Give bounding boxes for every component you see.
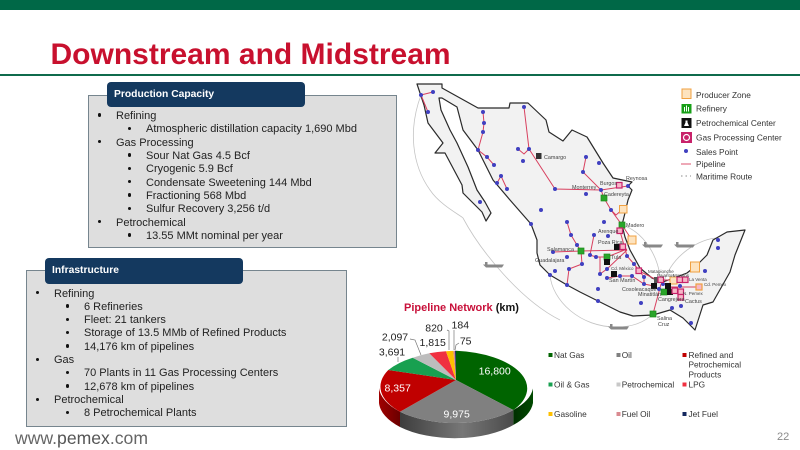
- pie legend: [548, 350, 741, 419]
- icon: petrochemical center: [682, 118, 692, 128]
- map place labels: Cadereyta: [604, 192, 629, 198]
- map place labels: Matapionche: [648, 269, 674, 274]
- map place labels: Poza Rica: [598, 240, 623, 246]
- map of Mexico: [413, 84, 745, 330]
- footer url: www.pemex.com: [15, 428, 148, 448]
- map place labels: Salina: [657, 316, 672, 322]
- text block: production capacity list: Cryogenic 5.9 Bcf: [146, 163, 233, 175]
- legend: jet fuel: Jet Fuel: [688, 409, 718, 419]
- map place labels: [535, 155, 727, 328]
- map place labels: Guadalajara: [535, 258, 564, 264]
- mexico mainland and baja outline: [417, 84, 745, 330]
- map place labels: Minatitlán: [638, 292, 661, 298]
- text block: infrastructure list: Petrochemical: [54, 394, 124, 406]
- pipelines: [421, 92, 699, 314]
- title rule: [0, 74, 800, 76]
- text block: infrastructure list: Fleet: 21 tankers: [84, 314, 166, 326]
- map place labels: Pajaritos: [657, 273, 675, 278]
- icon: refinery: [682, 104, 692, 114]
- legend: refined and petrochemical products: [682, 350, 741, 380]
- text block: production capacity list: 13.55 MMt nominal per year: [146, 230, 283, 242]
- pie value labels: 75: [460, 336, 472, 348]
- text block: production capacity list: Condensate Sweetening 144 Mbd: [146, 177, 312, 189]
- text block: infrastructure list: 12,678 km of pipelines: [84, 381, 194, 393]
- pie value labels: 8,357: [385, 382, 411, 394]
- text block: production capacity list: Fractioning 568 Mbd: [146, 190, 246, 202]
- label: sales point: Sales Point: [696, 147, 739, 157]
- legend: petrochemical: Petrochemical: [622, 380, 674, 390]
- map place labels: Cactus: [685, 299, 702, 305]
- text block: infrastructure list: Gas: [54, 354, 74, 366]
- petrochemical centers: [536, 153, 673, 295]
- text block: infrastructure list: 70 Plants in 11 Gas Processing Centers: [84, 367, 278, 379]
- slice: refined and petrochemical products 8,357: [380, 370, 456, 412]
- top green bar: [0, 0, 800, 10]
- icon: sales point: [684, 149, 688, 153]
- sales points: [419, 90, 720, 325]
- map place labels: Tula: [611, 255, 621, 261]
- map place labels: Cd. México: [611, 266, 634, 271]
- map place labels: Cosoleacaque: [622, 287, 656, 293]
- slice: lpg 1,815: [429, 351, 456, 380]
- label: producer zone: Producer Zone: [696, 90, 751, 100]
- pie value labels: 2,097: [382, 331, 408, 343]
- legend: refined and petrochemical products: Petrochemical: [688, 360, 741, 370]
- text block: production capacity list: Sulfur Recovery 3,256 t/d: [146, 203, 270, 215]
- map place labels: Cd. Pemex: [704, 282, 727, 287]
- icon: pipeline: [681, 163, 691, 165]
- legend: lpg: LPG: [688, 380, 705, 390]
- page number: 22: [777, 431, 789, 443]
- label: pipeline: Pipeline: [696, 159, 726, 169]
- slice: gasoline 820: [446, 351, 456, 380]
- panel: production capacity: [88, 95, 397, 248]
- text block: production capacity list: Refining: [116, 110, 156, 122]
- pie chart: pipeline network: [379, 320, 533, 438]
- map place labels: Cruz: [658, 322, 670, 328]
- map place labels: N. Pemex: [683, 291, 704, 296]
- pie side walls: [379, 388, 533, 438]
- text block: infrastructure list: 6 Refineries: [84, 301, 143, 313]
- slice: fuel oil 184: [453, 351, 456, 380]
- slice: petrochemical 2,097: [413, 353, 456, 380]
- slice: jet fuel 75: [455, 351, 456, 380]
- text block: infrastructure list: [36, 288, 286, 419]
- map place labels: Reynosa: [626, 176, 647, 182]
- tankers: [483, 242, 695, 330]
- text block: infrastructure list: Refining: [54, 288, 94, 300]
- icon: gas processing center: [681, 132, 692, 143]
- icon: maritime route: [681, 175, 691, 177]
- legend: nat gas: Nat Gas: [554, 350, 584, 360]
- label: maritime route: Maritime Route: [696, 172, 753, 182]
- refineries: [578, 195, 667, 317]
- map place labels: Monterrey: [572, 185, 597, 191]
- legend: oil: [616, 350, 632, 360]
- legend: oil and gas: Oil & Gas: [554, 380, 590, 390]
- map place labels: San Martín: [609, 278, 635, 284]
- map place labels: Camargo: [544, 155, 566, 161]
- map place labels: Burgos: [600, 181, 617, 187]
- map place labels: Madero: [626, 223, 644, 229]
- label: refinery: Refinery: [696, 104, 728, 114]
- legend: gasoline: Gasoline: [554, 409, 587, 419]
- map place labels: Salamanca: [547, 247, 574, 253]
- heading: infrastructure: [45, 258, 243, 284]
- pie value labels: [379, 320, 511, 421]
- producer zones: [620, 206, 700, 284]
- text block: production capacity list: Petrochemical: [116, 217, 186, 229]
- slice: nat gas 16,800: [456, 351, 527, 410]
- legend: fuel oil: Fuel Oil: [622, 409, 650, 419]
- map place labels: Morelos: [673, 273, 690, 278]
- leader lines: [398, 330, 459, 362]
- pie value labels: 1,815: [420, 337, 446, 349]
- panel: infrastructure: [26, 270, 347, 427]
- map place labels: Arenque: [598, 229, 618, 235]
- pie value labels: 3,691: [379, 347, 405, 359]
- pie value labels: 184: [452, 320, 469, 332]
- map place labels: La Venta: [689, 277, 707, 282]
- pie chart title: Pipeline Network (km): [404, 302, 519, 314]
- label: petrochemical center: Petrochemical Center: [696, 118, 776, 128]
- pie value labels: 16,800: [479, 366, 511, 378]
- gas processing centers: [616, 182, 702, 300]
- legend: refined and petrochemical products: Products: [688, 370, 721, 380]
- heading: production capacity: Production Capacity: [114, 89, 214, 100]
- pie value labels: 820: [425, 322, 443, 334]
- legend: refined and petrochemical products: Refined and: [688, 350, 734, 360]
- text block: infrastructure list: Storage of 13.5 MMb of Refined Products: [84, 327, 286, 339]
- map legend: [681, 89, 782, 182]
- title: Downstream and Midstream: [50, 38, 451, 71]
- text block: production capacity list: Atmospheric distillation capacity 1,690 Mbd: [146, 123, 357, 135]
- maritime routes: [413, 95, 718, 327]
- text block: infrastructure list: 8 Petrochemical Plants: [84, 407, 196, 419]
- text block: production capacity list: [98, 110, 357, 242]
- map place labels: Cangrejera: [658, 297, 685, 303]
- text block: production capacity list: Gas Processing: [116, 137, 194, 149]
- label: gas processing center: Gas Processing Center: [696, 132, 782, 142]
- legend: oil: Oil: [622, 350, 632, 360]
- heading: production capacity: [107, 82, 305, 107]
- icon: producer zone: [682, 89, 691, 98]
- slice: oil and gas 3,691: [388, 358, 456, 380]
- text block: production capacity list: Sour Nat Gas 4.5 Bcf: [146, 150, 250, 162]
- text block: infrastructure list: 14,176 km of pipelines: [84, 341, 194, 353]
- heading: infrastructure: Infrastructure: [52, 265, 119, 276]
- slice: oil 9,975: [400, 380, 513, 423]
- pie value labels: 9,975: [444, 409, 470, 421]
